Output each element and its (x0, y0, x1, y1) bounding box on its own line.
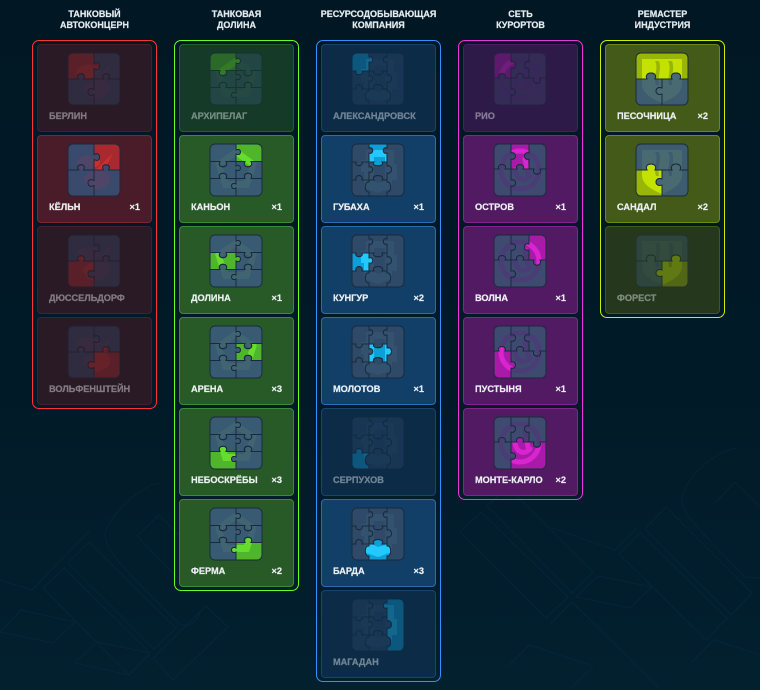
label: барда: БАРДА (333, 566, 365, 576)
heading: танковая долина: ТАНКОВАЯ (212, 9, 261, 19)
count: каньон: ×1 (272, 202, 282, 212)
card: барда (321, 499, 436, 587)
label: долина: ДОЛИНА (191, 293, 231, 303)
count: сандал: ×2 (698, 202, 708, 212)
icon: puzzle берлин (68, 54, 120, 104)
count: остров: ×1 (556, 202, 566, 212)
label: магадан: МАГАДАН (333, 657, 379, 667)
label: молотов: МОЛОТОВ (333, 384, 380, 394)
heading: танковый автоконцерн (60, 8, 129, 30)
card: форест (605, 226, 720, 314)
heading: ресурсодобывающая компания: РЕСУРСОДОБЫВАЮЩАЯ (321, 9, 436, 19)
count: небоскрёбы: ×3 (272, 475, 282, 485)
count: арена: ×3 (272, 384, 282, 394)
panel: танковый автоконцерн (32, 40, 157, 409)
card: рио (463, 44, 578, 132)
icon: puzzle губаха (352, 144, 404, 196)
heading: сеть курортов (496, 9, 545, 30)
heading: ресурсодобывающая компания (321, 9, 436, 30)
icon: puzzle ферма (210, 508, 262, 560)
icon: puzzle арена (210, 326, 262, 378)
panel: ресурсодобывающая компания (316, 40, 441, 682)
label: остров: ОСТРОВ (475, 202, 514, 212)
label: рио: РИО (475, 111, 495, 121)
label: каньон: КАНЬОН (191, 202, 230, 212)
label: сандал: САНДАЛ (617, 202, 656, 212)
heading: ресурсодобывающая компания: КОМПАНИЯ (352, 20, 405, 30)
card: молотов (321, 317, 436, 405)
panel: сеть курортов (458, 40, 583, 500)
card: серпухов (321, 408, 436, 496)
icon: puzzle долина (210, 234, 262, 288)
icon: puzzle молотов (352, 326, 404, 378)
card: кунгур (321, 226, 436, 314)
icon: puzzle небоскрёбы (210, 416, 262, 470)
label: серпухов: СЕРПУХОВ (333, 475, 384, 485)
label: архипелаг: АРХИПЕЛАГ (191, 111, 247, 121)
icon: puzzle рио (494, 54, 546, 104)
icon: puzzle барда (352, 508, 404, 560)
icon: puzzle песочница (636, 52, 688, 106)
label: песочница: ПЕСОЧНИЦА (617, 111, 676, 121)
heading: танковый автоконцерн: ТАНКОВЫЙ (68, 9, 121, 19)
icon: puzzle серпухов (352, 418, 404, 468)
icon: puzzle магадан (352, 600, 404, 650)
panel: ремастер индустрия (600, 40, 725, 318)
card: берлин (37, 44, 152, 132)
panel: танковая долина (174, 40, 299, 591)
label: кунгур: КУНГУР (333, 293, 368, 303)
heading: танковая долина: ДОЛИНА (217, 20, 256, 30)
label: пустыня: ПУСТЫНЯ (475, 384, 522, 394)
card: александровск (321, 44, 436, 132)
card: сандал (605, 135, 720, 223)
icon: puzzle каньон (210, 144, 262, 196)
count: кёльн: ×1 (130, 202, 140, 212)
heading: ремастер индустрия (635, 9, 690, 30)
card: небоскрёбы (179, 408, 294, 496)
heading: танковый автоконцерн: АВТОКОНЦЕРН (60, 20, 129, 30)
label: кёльн: КЁЛЬН (49, 202, 80, 212)
label: берлин: БЕРЛИН (49, 111, 87, 121)
icon: puzzle форест (636, 234, 688, 288)
label: арена: АРЕНА (191, 384, 223, 394)
icon: puzzle архипелаг (210, 54, 262, 104)
card: песочница (605, 44, 720, 132)
card: долина (179, 226, 294, 314)
count: кунгур: ×2 (414, 293, 424, 303)
icon: puzzle александровск (352, 54, 404, 104)
heading: сеть курортов: СЕТЬ (508, 9, 533, 19)
count: монте-карло: ×2 (556, 475, 566, 485)
icon: puzzle вольфенштейн (68, 326, 120, 378)
card: дюссельдорф (37, 226, 152, 314)
icon: puzzle сандал (636, 144, 688, 196)
card: архипелаг (179, 44, 294, 132)
label: волна: ВОЛНА (475, 293, 508, 303)
card: кёльн (37, 135, 152, 223)
count: долина: ×1 (272, 293, 282, 303)
label: александровск: АЛЕКСАНДРОВСК (333, 111, 416, 121)
count: ферма: ×2 (272, 566, 282, 576)
label: вольфенштейн: ВОЛЬФЕНШТЕЙН (49, 384, 130, 394)
count: губаха: ×1 (414, 202, 424, 212)
icon: puzzle кёльн (68, 144, 120, 196)
card: каньон (179, 135, 294, 223)
count: молотов: ×1 (414, 384, 424, 394)
heading: ремастер индустрия: ИНДУСТРИЯ (635, 20, 690, 30)
icon: puzzle волна (494, 234, 546, 288)
icon: puzzle пустыня (494, 326, 546, 378)
card: губаха (321, 135, 436, 223)
label: губаха: ГУБАХА (333, 202, 370, 212)
card: вольфенштейн (37, 317, 152, 405)
card: остров (463, 135, 578, 223)
label: дюссельдорф: ДЮССЕЛЬДОРФ (49, 293, 125, 303)
label: монте-карло: МОНТЕ-КАРЛО (475, 475, 543, 485)
label: небоскрёбы: НЕБОСКРЁБЫ (191, 475, 258, 485)
count: барда: ×3 (414, 566, 424, 576)
card: арена (179, 317, 294, 405)
count: волна: ×1 (556, 293, 566, 303)
card: монте-карло (463, 408, 578, 496)
icon: puzzle кунгур (352, 234, 404, 288)
heading: танковая долина (212, 9, 261, 30)
card: магадан (321, 590, 436, 678)
heading: ремастер индустрия: РЕМАСТЕР (638, 9, 687, 19)
card: волна (463, 226, 578, 314)
heading: сеть курортов: КУРОРТОВ (496, 20, 545, 30)
card: пустыня (463, 317, 578, 405)
label: ферма: ФЕРМА (191, 566, 225, 576)
label: форест: ФОРЕСТ (617, 293, 656, 303)
count: пустыня: ×1 (556, 384, 566, 394)
icon: puzzle дюссельдорф (68, 236, 120, 286)
card: ферма (179, 499, 294, 587)
icon: puzzle остров (494, 144, 546, 196)
count: песочница: ×2 (698, 111, 708, 121)
icon: puzzle монте-карло (494, 416, 546, 470)
